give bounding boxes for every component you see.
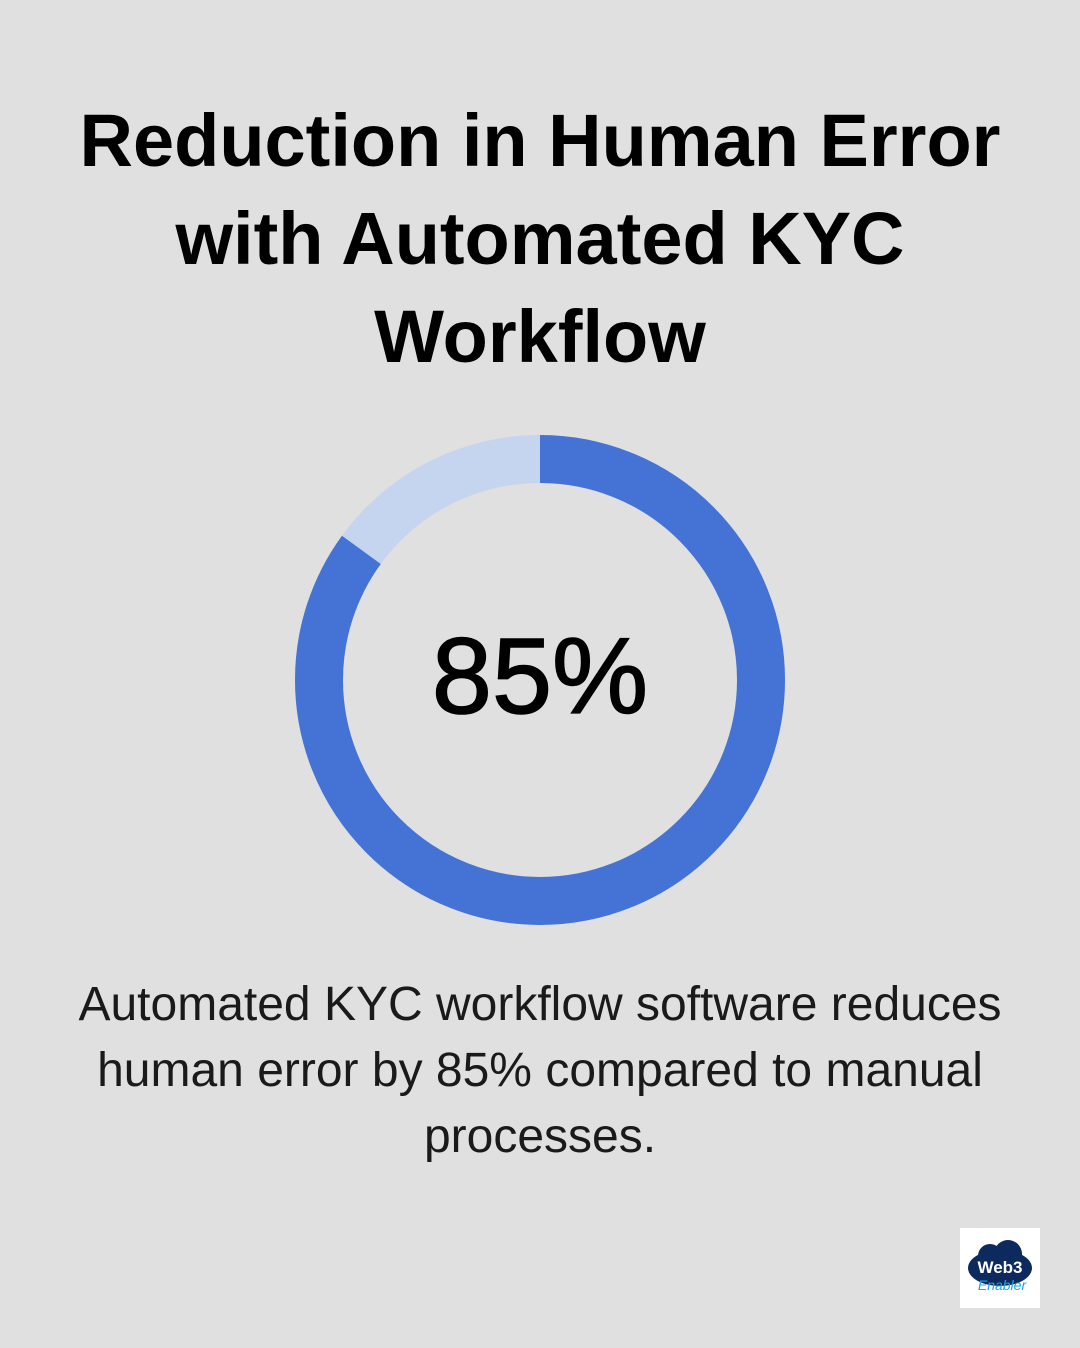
donut background segment bbox=[319, 459, 761, 901]
title bbox=[80, 99, 1000, 378]
logo: Enabler bbox=[978, 1277, 1027, 1293]
description text: Automated KYC workflow software reduces bbox=[78, 978, 1002, 1031]
logo bbox=[960, 1228, 1040, 1308]
title: Reduction in Human Error bbox=[80, 99, 1000, 182]
logo: Web3 bbox=[977, 1258, 1023, 1277]
title: with Automated KYC bbox=[175, 197, 904, 280]
donut 85% segment bbox=[319, 459, 761, 901]
description text: processes. bbox=[424, 1110, 656, 1163]
description text: human error by 85% compared to manual bbox=[97, 1044, 983, 1097]
description text bbox=[78, 978, 1002, 1163]
title: Workflow bbox=[374, 295, 706, 378]
percentage value: 85% bbox=[432, 615, 648, 736]
